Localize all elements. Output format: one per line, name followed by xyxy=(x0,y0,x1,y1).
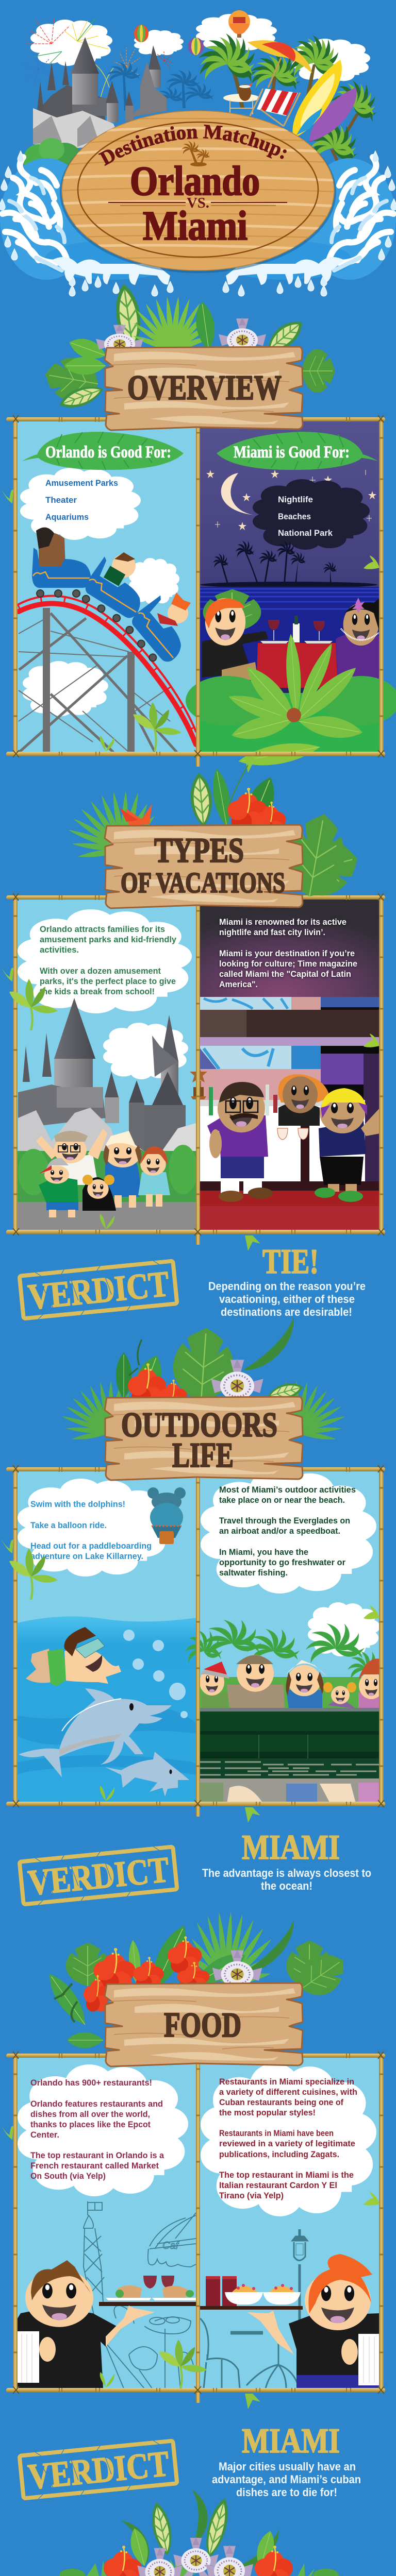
cloud xyxy=(201,1471,376,1594)
verdict result: TIE! xyxy=(262,1242,319,1281)
text: orlando outdoors: Head out for a paddleboarding xyxy=(30,1541,152,1551)
waitress xyxy=(248,2254,380,2389)
text: orlando vacations: Orlando attracts families for its xyxy=(40,924,165,934)
water splash xyxy=(0,151,396,296)
text: miami food: Restaurants in Miami have been xyxy=(219,2128,334,2138)
silhouette palms xyxy=(107,61,214,111)
verdict: miami food xyxy=(19,2421,361,2502)
balloons xyxy=(134,10,250,55)
eiffel tower and cafe outline: Caf xyxy=(162,2240,180,2251)
family on boat xyxy=(200,1655,384,1708)
bar patrons xyxy=(207,1074,380,1202)
leaf banner: orlando xyxy=(22,432,184,470)
text: orlando food: Center. xyxy=(30,2130,59,2140)
tropical foliage xyxy=(41,282,335,413)
verdict text: the ocean! xyxy=(261,1879,312,1892)
text: miami outdoors: opportunity to go freshwater or xyxy=(219,1557,345,1567)
text: miami outdoors xyxy=(219,1485,356,1578)
sign: outdoors life xyxy=(105,1397,303,1480)
verdict text: The advantage is always closest to xyxy=(202,1867,371,1879)
tropical foliage xyxy=(59,2489,339,2576)
panel: miami overview xyxy=(186,419,396,771)
text: orlando food: On South (via Yelp) xyxy=(30,2171,106,2181)
text: miami outdoors: an airboat and/or a speedboat. xyxy=(219,1526,340,1536)
verdict text: destinations are desirable! xyxy=(221,1306,352,1318)
title: Miami: Miami xyxy=(143,204,248,249)
tree xyxy=(23,138,81,178)
text: miami outdoors: Travel through the Everglades on xyxy=(219,1516,350,1526)
mouse balloon xyxy=(147,1487,186,1544)
sea xyxy=(18,1617,199,1803)
text: orlando vacations: With over a dozen amusement xyxy=(40,966,161,976)
leaf banner: miami xyxy=(217,432,378,470)
surfboards xyxy=(292,60,357,142)
umbrella xyxy=(248,40,312,88)
tropical foliage xyxy=(57,756,365,903)
text: orlando outdoors: Swim with the dolphins! xyxy=(30,1499,125,1509)
sign: types of vacations xyxy=(105,825,303,908)
tropical foliage xyxy=(42,1903,354,2048)
cloud xyxy=(201,2063,376,2216)
plant xyxy=(133,702,182,751)
stars xyxy=(206,470,376,530)
list: orlando good for: Amusement Parks xyxy=(45,478,118,488)
fireworks xyxy=(23,18,173,98)
street lamp, chair and table xyxy=(200,2229,308,2388)
foreground foliage xyxy=(186,633,396,771)
panel: orlando overview xyxy=(18,419,197,753)
text: miami vacations: nightlife and fast city livin’. xyxy=(219,927,325,937)
coaster track xyxy=(19,596,196,744)
couple at table xyxy=(202,589,380,685)
plant xyxy=(9,1548,58,1600)
text: miami outdoors: saltwater fishing. xyxy=(219,1568,288,1578)
bamboo frame xyxy=(2,2052,385,2409)
verdict text: dishes are to die for! xyxy=(236,2486,337,2499)
stamp: VERDICT xyxy=(26,1850,171,1903)
panel: miami vacations xyxy=(190,897,380,1231)
verdict text: Major cities usually have an xyxy=(219,2460,356,2473)
section: outdoors life xyxy=(2,1317,386,1908)
family of five xyxy=(36,1128,170,1217)
panel: miami outdoors xyxy=(185,1469,386,1803)
title: Orlando: Orlando xyxy=(130,159,260,204)
text: orlando food: Orlando has 900+ restaurants! xyxy=(30,2078,152,2088)
trophy xyxy=(190,1065,207,1099)
text: orlando food: French restaurant called Market xyxy=(30,2161,159,2171)
coaster supports xyxy=(19,608,177,752)
title: destination matchup: Destination Matchup: xyxy=(98,125,287,166)
palms xyxy=(185,1618,386,1708)
heading: of vacations: OF VACATIONS xyxy=(121,867,285,899)
stamp: VERDICT xyxy=(26,2444,171,2497)
list: miami good for: National Park xyxy=(278,528,333,538)
text: orlando vacations: parks, it's the perfect place to give xyxy=(40,976,176,986)
night water xyxy=(200,587,380,680)
food and drinks on tray xyxy=(200,2276,303,2310)
text: miami vacations: America". xyxy=(219,979,258,989)
text: orlando vacations: amusement parks and kid-friendly xyxy=(40,935,177,944)
deck chair xyxy=(250,89,300,126)
stamp: VERDICT xyxy=(26,1264,171,1317)
text: miami vacations: looking for culture; Time magazine xyxy=(219,959,357,969)
dinner table xyxy=(256,616,338,688)
text: orlando outdoors: Take a balloon ride. xyxy=(30,1520,107,1530)
night palms xyxy=(200,540,377,588)
panel: orlando food xyxy=(18,2055,197,2389)
text: miami outdoors: take place on or near the beach. xyxy=(219,1495,345,1505)
heading: overview: OVERVIEW xyxy=(127,368,282,407)
verdict result: MIAMI xyxy=(242,2421,340,2460)
bamboo frame xyxy=(2,415,385,773)
swimmer xyxy=(26,1627,121,1686)
text: miami vacations: Miami is renowned for its active xyxy=(219,917,346,927)
list: orlando good for: Aquariums xyxy=(45,512,89,522)
text: orlando food: dishes from all over the world, xyxy=(30,2109,150,2119)
bamboo frame xyxy=(2,893,385,1251)
cloud xyxy=(253,479,370,550)
cloud xyxy=(18,909,192,1013)
dolphins xyxy=(19,1688,189,1797)
eiffel tower and cafe outline xyxy=(84,2201,196,2388)
clouds xyxy=(20,468,179,716)
cloud xyxy=(18,2064,188,2196)
palm trees xyxy=(194,25,383,169)
heading: food: FOOD xyxy=(164,2005,241,2044)
list: orlando good for: Theater xyxy=(45,495,77,505)
versus divider: VS. xyxy=(187,195,209,211)
header illustration xyxy=(0,10,396,297)
plant xyxy=(159,2340,207,2388)
panel: miami food xyxy=(200,2055,380,2389)
wood grain xyxy=(62,118,335,260)
text: miami vacations xyxy=(219,917,357,989)
text: miami outdoors: Most of Miami’s outdoor activities xyxy=(219,1485,356,1495)
verdict text xyxy=(208,1280,366,1318)
text: orlando food: thanks to places like the Epcot xyxy=(30,2120,151,2129)
verdict text: vacationing, either of these xyxy=(219,1293,355,1306)
waiter xyxy=(18,2260,155,2388)
section: entertainment xyxy=(2,2489,385,2576)
sign: food xyxy=(105,1983,303,2066)
bar interior xyxy=(200,997,380,1231)
panel: orlando vacations xyxy=(18,897,197,1231)
text: miami food: Restaurants in Miami specialize in xyxy=(219,2077,354,2087)
wine and plates on tray xyxy=(99,2276,197,2306)
palm icon xyxy=(182,140,210,166)
list: miami good for xyxy=(278,495,333,538)
text: orlando outdoors xyxy=(30,1499,152,1561)
text: orlando outdoors: adventure on Lake Killarney. xyxy=(30,1551,143,1561)
boat hull xyxy=(200,1708,380,1778)
text: miami food: The top restaurant in Miami is the xyxy=(219,2170,354,2180)
verdict text: advantage, and Miami’s cuban xyxy=(212,2473,361,2486)
tropical foliage xyxy=(52,1317,356,1453)
section: food xyxy=(2,1903,385,2502)
text: orlando vacations: the kids a break from school! xyxy=(40,987,155,996)
text: miami food: a variety of different cuisines, with xyxy=(219,2087,357,2097)
verdict text xyxy=(202,1867,371,1892)
verdict: tie xyxy=(19,1242,366,1322)
moon xyxy=(221,473,255,515)
verdict text: Depending on the reason you’re xyxy=(208,1280,366,1293)
text: orlando vacations: activities. xyxy=(40,945,79,955)
text: miami vacations: called Miami the "Capital of Latin xyxy=(219,969,351,979)
text: miami food: Tirano (via Yelp) xyxy=(219,2191,284,2200)
text: orlando food: Orlando features restaurants and xyxy=(30,2099,163,2109)
text: miami food: publications, including Zagats. xyxy=(219,2149,339,2159)
cloud xyxy=(18,1479,168,1577)
text: miami food xyxy=(219,2077,357,2200)
bubbles xyxy=(123,1630,188,1718)
wooden oval title sign xyxy=(60,110,336,273)
heading: types: TYPES xyxy=(154,831,244,870)
bamboo frame xyxy=(2,1465,385,1823)
verdict result: MIAMI xyxy=(242,1827,340,1867)
castle xyxy=(33,37,167,148)
verdict text xyxy=(212,2460,361,2499)
castle xyxy=(18,998,197,1231)
heading: outdoors: OUTDOORS xyxy=(121,1405,277,1444)
text: miami food: Cuban restaurants being one of xyxy=(219,2097,343,2107)
coaster riders and cars xyxy=(32,528,197,671)
list: miami good for: Nightlife xyxy=(278,495,313,504)
sign: overview xyxy=(105,347,303,430)
beach table and coconut xyxy=(223,82,259,114)
text: miami food: the most popular styles! xyxy=(219,2108,316,2117)
text: miami vacations: Miami is your destination if you’re xyxy=(219,948,355,958)
heading: life: LIFE xyxy=(172,1435,234,1475)
panel: orlando outdoors xyxy=(18,1469,199,1803)
heading: miami is good for: Miami is Good For: xyxy=(234,443,350,462)
text: orlando food: The top restaurant in Orlando is a xyxy=(30,2150,164,2160)
text: orlando food xyxy=(30,2078,164,2181)
plant xyxy=(9,979,58,1030)
water reflection xyxy=(200,1758,380,1803)
section: types of vacations xyxy=(2,756,385,1322)
list: miami good for: Beaches xyxy=(278,512,311,521)
clouds xyxy=(30,14,370,82)
verdict: miami outdoors xyxy=(19,1827,371,1908)
text: miami food: Italian restaurant Cardon Y El xyxy=(219,2180,337,2190)
heading: orlando is good for: Orlando is Good For: xyxy=(45,443,171,462)
text: miami food: reviewed in a variety of legitimate xyxy=(219,2139,355,2148)
section: overview xyxy=(2,282,396,773)
text: miami outdoors: In Miami, you have the xyxy=(219,1547,308,1557)
list: orlando good for xyxy=(45,478,118,522)
text: orlando vacations xyxy=(40,924,177,996)
